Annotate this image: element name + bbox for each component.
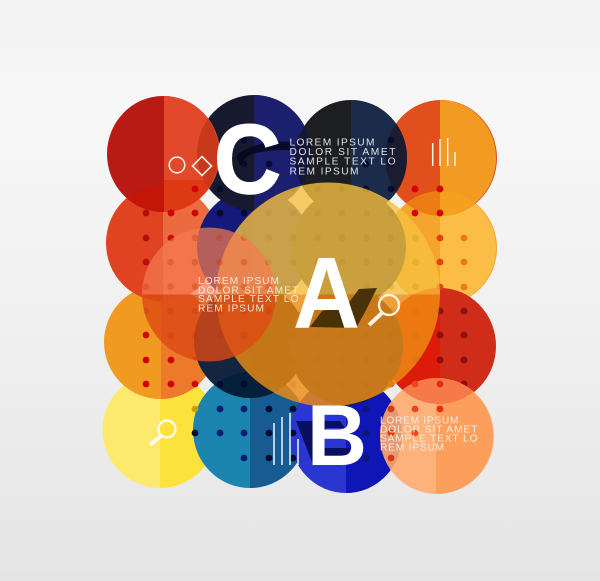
overlap: dark and teal xyxy=(214,372,273,398)
circle: yellow xyxy=(102,372,218,488)
overlap: peach and red xyxy=(402,378,474,404)
overlap: orange and golden xyxy=(406,191,476,216)
lower half xyxy=(216,294,440,406)
overlap: red and navy xyxy=(197,120,218,188)
circle grid xyxy=(102,95,497,493)
icon: magnifier on yellow xyxy=(150,420,176,445)
dots: dark on blue xyxy=(192,137,394,461)
dots: navy on teal and blue xyxy=(217,406,369,461)
shadow behind letter A xyxy=(310,288,377,328)
dots: maroon on red xyxy=(437,308,467,387)
overlap: red and red-orange xyxy=(126,180,208,212)
circle: red top left xyxy=(107,96,220,212)
text block: bottom: REM IPSUM xyxy=(380,443,444,454)
dots: warm xyxy=(143,186,443,387)
text block: bottom xyxy=(380,416,478,454)
text block: top: SAMPLE TEXT LO xyxy=(290,157,396,168)
circle: red right row 3 xyxy=(383,288,496,404)
overlap: peach and blue xyxy=(380,401,402,470)
circle: golden right row 2 xyxy=(385,191,497,305)
arc shadow near C xyxy=(236,142,292,165)
circle: dark row 3 col 3 xyxy=(289,287,403,405)
icon: bars on blue xyxy=(274,413,298,465)
text block: middle: LOREM IPSUM xyxy=(198,276,279,287)
dots: orange on golden xyxy=(461,235,467,290)
circle: dark navy top xyxy=(197,95,311,211)
circle: dark row 2 col 3 xyxy=(292,189,406,305)
overlap: charcoal and orange xyxy=(385,124,407,192)
text block: middle xyxy=(198,276,299,315)
big translucent circle xyxy=(216,183,440,406)
shadow behind letter B xyxy=(296,421,350,462)
text block: middle: REM IPSUM xyxy=(198,304,264,315)
text block: top xyxy=(290,138,396,178)
translucent pink circle xyxy=(142,227,276,361)
text block: top: LOREM IPSUM xyxy=(290,138,374,149)
text block: top: DOLOR SIT AMET xyxy=(290,147,396,158)
letter B: B xyxy=(307,388,367,484)
text block: top: REM IPSUM xyxy=(290,167,358,178)
circle: orange top right xyxy=(385,100,497,216)
text block: bottom: DOLOR SIT AMET xyxy=(380,425,478,436)
icon: bars top right xyxy=(433,138,455,166)
dot: faint on yellow edge xyxy=(192,406,198,412)
faint dots on big circle xyxy=(242,186,440,388)
letter C: C xyxy=(214,104,281,214)
letter A: A xyxy=(293,238,360,350)
upper half xyxy=(216,183,440,294)
circle: orange row 3 xyxy=(104,285,217,399)
icon: diamond outline xyxy=(192,156,212,176)
text block: middle: DOLOR SIT AMET xyxy=(198,285,298,296)
text block: middle: SAMPLE TEXT LO xyxy=(198,294,299,305)
pink lower half xyxy=(142,294,276,361)
circle: dark row 3 xyxy=(194,284,306,398)
circle: navy row 2 xyxy=(197,189,311,305)
icon: magnifier on big circle xyxy=(369,295,399,325)
pink upper half xyxy=(142,227,276,294)
faint dots on pink circle xyxy=(142,234,272,362)
circle: red-orange row 2 xyxy=(106,185,219,301)
peach dots xyxy=(388,381,443,461)
overlap: charcoal and navy xyxy=(295,126,311,185)
circle: teal blue xyxy=(193,372,307,488)
circle: peach xyxy=(380,378,494,494)
circle: royal blue xyxy=(290,377,402,493)
icon: circle outline xyxy=(169,157,185,173)
text block: bottom: SAMPLE TEXT LO xyxy=(380,434,478,445)
circle: charcoal top xyxy=(295,100,407,216)
text block: bottom: LOREM IPSUM xyxy=(380,416,458,427)
